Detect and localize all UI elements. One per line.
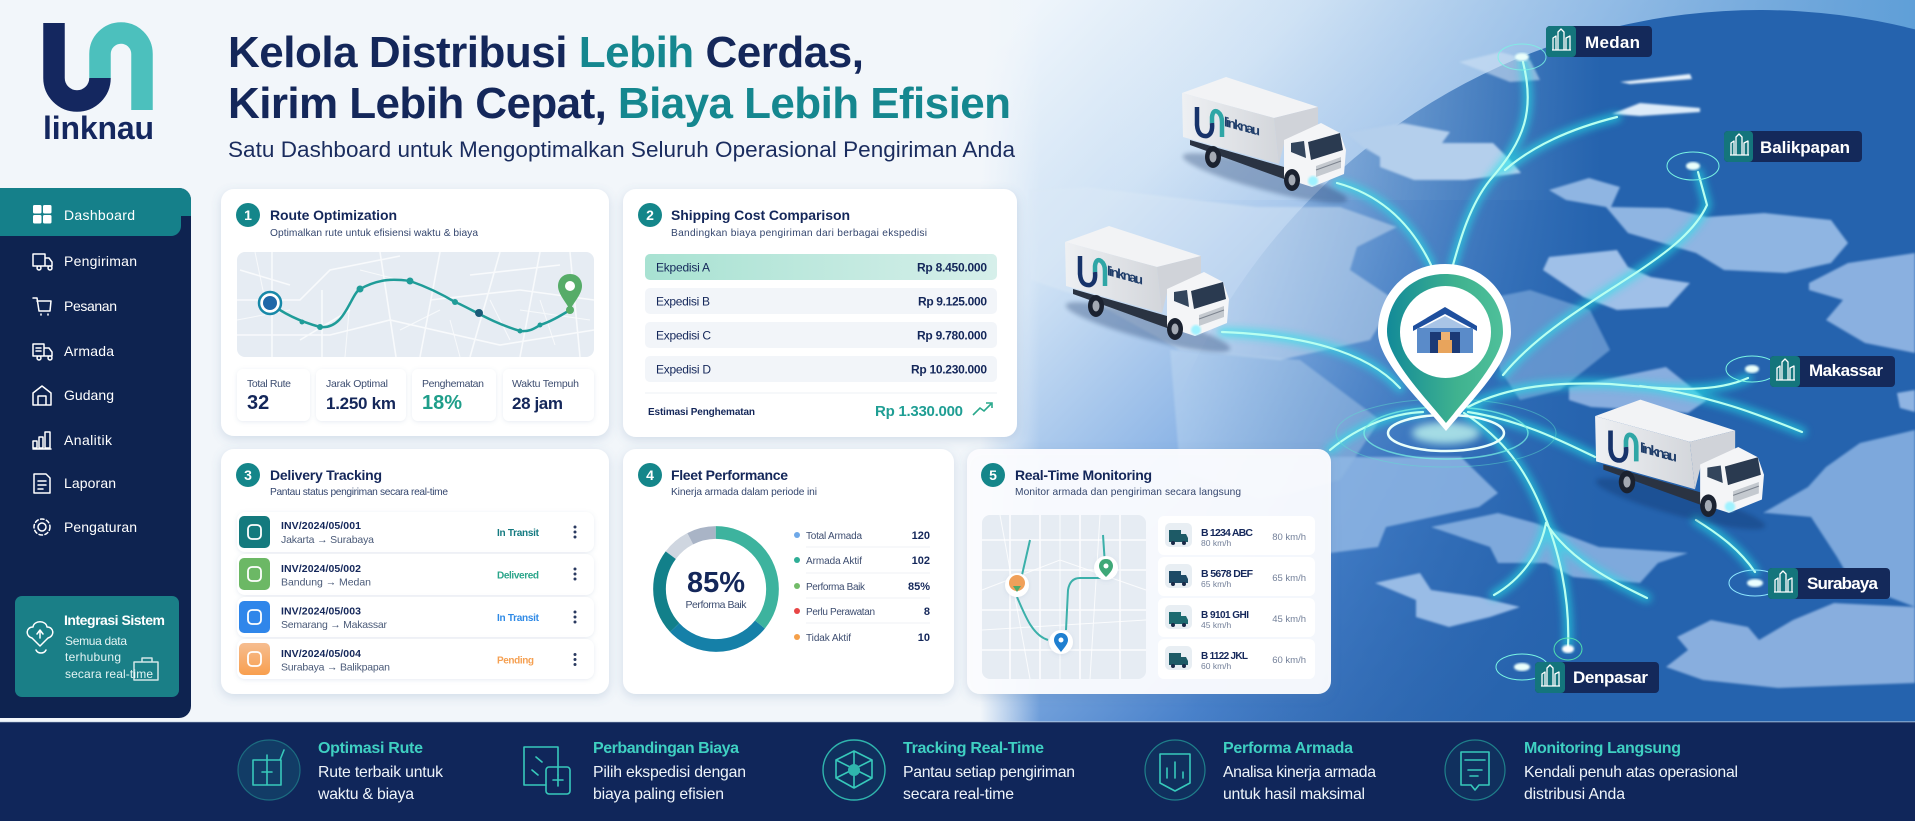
icon: warehouse [1413,307,1477,353]
sidebar [0,188,191,718]
vehicle: B 1234 ABC: 80 km/h [1201,538,1232,548]
panel: 1 Route Optimization: Optimalkan rute untuk efisiensi waktu & biaya [270,228,478,239]
vehicle: B 5678 DEF [1158,557,1315,596]
logo: linknau [43,23,154,146]
feature: Tracking Real-Time: Tracking Real-Time [903,740,1044,757]
menu: Pengiriman: Pengiriman [64,253,137,269]
row: Expedisi B: Rp 9.125.000 [918,294,987,308]
stat: Jarak Optimal [316,369,406,421]
shipment row 4: Pending [497,656,534,666]
vehicle: B 9101 GHI: B 9101 GHI [1201,610,1249,621]
panel: 5 Real-Time Monitoring: Real-Time Monitoring [1015,467,1152,483]
donut chart [660,532,772,646]
truck 3: linknau [1640,440,1677,466]
feature: Tracking Real-Time [823,740,1075,803]
bottom feature band [0,721,1915,821]
city label: Medan: Medan [1585,33,1640,52]
row: Expedisi B: Expedisi B [656,294,710,308]
stat: Jarak Optimal: 1.250 km [326,394,396,413]
truck 1 [1180,77,1350,212]
subtitle: Satu Dashboard untuk Mengoptimalkan Seluruh Operasional Pengiriman Anda [228,137,1015,162]
stat: Jarak Optimal: Jarak Optimal [326,378,388,390]
estimated savings [648,403,992,420]
monitoring map [982,515,1146,679]
row: Ekpedisi A: Rp 8.450.000 [917,260,987,274]
vehicle: B 1234 ABC: 80 km/h [1272,532,1306,543]
city nodes [1496,44,1781,680]
stat: Total Rute [237,369,310,421]
city label: Balikpapan [1724,131,1862,162]
stat: Waktu Tempuh [503,369,594,421]
city label: Denpasar [1535,662,1659,693]
row: Expedisi C: Expedisi C [656,328,711,342]
active menu: Dashboard [0,188,191,236]
truck 2: linknau [1107,263,1143,288]
row: Expedisi D: Expedisi D [656,362,711,376]
legend: 8 [924,606,930,618]
legend: 10 [918,632,930,644]
menu: Laporan [34,474,116,493]
shipment row 1: In Transit [497,528,540,539]
stat: Penghematan [412,369,496,421]
vehicle: B 1234 ABC [1158,516,1315,555]
integration box: terhubung [65,650,121,664]
menu: Pengiriman [33,253,137,270]
row: Ekpedisi A: Ekpedisi A [656,260,710,274]
panel: 3 Delivery Tracking: Delivery Tracking [270,467,382,483]
shipment row 2: Delivered [497,570,539,582]
feature: Performa Armada: Performa Armada [1223,740,1353,757]
panel: 1 Route Optimization: Route Optimization [270,207,397,223]
integration box: Semua data [65,634,127,648]
feature: Monitoring Langsung [1445,740,1738,803]
stat: Penghematan: Penghematan [422,378,484,390]
shipment row 4 [237,639,594,679]
title [228,28,1011,128]
shipment row 1: Jakarta → Surabaya [281,534,374,546]
panel: 2 Shipping Cost Comparison [623,189,1017,437]
row: Expedisi C: Rp 9.780.000 [917,328,987,342]
legend: Armada Aktif [806,556,862,567]
legend [794,530,930,644]
city label: Makassar [1770,356,1895,387]
shipment row 3: In Transit [497,613,540,624]
legend: Perlu Perawatan [806,607,875,618]
title: Kelola Distribusi Lebih Cerdas, [228,28,864,77]
feature: Perbandingan Biaya: biaya paling efisien [593,786,724,803]
donut chart: 85% [687,567,745,599]
feature: Monitoring Langsung: distribusi Anda [1524,786,1625,803]
panel: 1 Route Optimization: 1 [244,207,252,223]
feature: Perbandingan Biaya: Pilih ekspedisi dengan [593,764,746,781]
vehicle: B 9101 GHI: 45 km/h [1201,620,1232,630]
integration box: Integrasi Sistem [64,612,165,628]
feature: Optimasi Rute: Rute terbaik untuk [318,764,443,781]
vehicle: B 1122 JKL: B 1122 JKL [1201,651,1248,662]
shipment row 4: INV/2024/05/004 [281,648,361,660]
estimated savings: Rp 1.330.000 [875,403,963,420]
city label: Denpasar: Denpasar [1573,668,1648,687]
integration box: secara real-time [65,667,153,681]
panel: 2 Shipping Cost Comparison: Shipping Cost Comparison [671,207,850,223]
row: Ekpedisi A [645,254,997,280]
vehicle: B 5678 DEF: B 5678 DEF [1201,568,1254,580]
shipment row 2 [237,554,594,595]
legend: 85% [908,581,930,593]
active menu: Dashboard: Dashboard [64,207,135,223]
legend: 120 [912,530,930,542]
panel: 3 Delivery Tracking: Pantau status pengiriman secara real-time [270,487,448,498]
feature: Monitoring Langsung: Kendali penuh atas operasional [1524,764,1738,781]
panel: 4 Fleet Performance: 4 [646,467,654,483]
panel: 5 Real-Time Monitoring: 5 [989,467,997,483]
panel: 2 Shipping Cost Comparison: Bandingkan biaya pengiriman dari berbagai ekspedisi [671,228,927,239]
integration box [15,596,179,697]
menu: Pesanan: Pesanan [64,298,117,314]
shipment row 2: INV/2024/05/002 [281,563,361,575]
menu: Armada [33,343,114,360]
menu: Pengaturan: Pengaturan [64,519,137,535]
stat: Waktu Tempuh: Waktu Tempuh [512,378,579,390]
stat: Total Rute: 32 [247,392,269,414]
feature: Performa Armada: Analisa kinerja armada [1223,764,1376,781]
estimated savings: Estimasi Penghematan [648,407,755,418]
legend: Performa Baik [806,582,866,593]
title: Kirim Lebih Cepat, Biaya Lebih Efisien [228,79,1011,128]
feature: Optimasi Rute: Optimasi Rute [318,740,423,757]
feature: Perbandingan Biaya [524,740,746,803]
menu: Armada: Armada [64,343,114,359]
panel: 1 Route Optimization [221,189,609,436]
vehicle: B 1122 JKL: 60 km/h [1201,661,1232,671]
hub rings [1336,399,1556,467]
shipment row 3 [237,597,594,637]
feature: Monitoring Langsung: Monitoring Langsung [1524,740,1681,757]
legend: 102 [912,555,930,567]
vehicle: B 1122 JKL: 60 km/h [1272,655,1306,666]
truck 1: linknau [1224,114,1260,139]
panel: 3 Delivery Tracking: 3 [244,467,252,483]
vehicle: B 9101 GHI [1158,598,1315,637]
feature: Perbandingan Biaya: Perbandingan Biaya [593,740,739,757]
city label: Makassar: Makassar [1809,361,1883,380]
vehicle: B 1234 ABC: B 1234 ABC [1201,527,1253,539]
feature: Optimasi Rute [238,740,443,803]
feature: Optimasi Rute: waktu & biaya [317,786,414,803]
main hub pin with warehouse [1378,264,1511,431]
shipment row 2: Bandung → Medan [281,576,371,588]
row: Expedisi B [645,288,997,314]
stat: Waktu Tempuh: 28 jam [512,394,563,413]
shipment row 4: Surabaya → Balikpapan [281,662,390,674]
menu: Laporan: Laporan [64,475,116,491]
panel: 2 Shipping Cost Comparison: 2 [646,207,654,223]
panel: 4 Fleet Performance: Fleet Performance [671,467,788,483]
menu: Gudang [33,386,114,405]
stat: Total Rute: Total Rute [247,378,291,390]
vehicle: B 9101 GHI: 45 km/h [1272,614,1306,625]
logo: linknau: linknau [43,110,154,146]
legend: Tidak Aktif [806,633,851,644]
shipment row 1: INV/2024/05/001 [281,520,361,532]
vehicle: B 5678 DEF: 65 km/h [1272,573,1306,584]
feature: Performa Armada: untuk hasil maksimal [1223,786,1365,803]
map: Indonesia distribution network [980,0,1915,730]
city label: Balikpapan: Balikpapan [1760,138,1850,157]
shipment row 3: INV/2024/05/003 [281,606,361,618]
route map [237,252,594,357]
row: Expedisi C [645,322,997,348]
feature: Performa Armada [1145,740,1376,803]
menu: Pesanan [33,298,117,315]
legend: Total Armada [806,531,862,542]
land masses [1030,52,1915,688]
city label: Surabaya: Surabaya [1807,574,1879,593]
delivery routes [1222,62,1802,647]
menu: Gudang: Gudang [64,387,114,403]
truck 2 [1063,226,1233,361]
stat: Penghematan: 18% [422,392,462,414]
city label: Medan [1546,26,1652,57]
menu: Analitik: Analitik [64,432,113,448]
feature: Tracking Real-Time: Pantau setiap pengiriman [903,764,1075,781]
panel: 3 Delivery Tracking [221,449,609,694]
panel: 5 Real-Time Monitoring: Monitor armada dan pengiriman secara langsung [1015,487,1241,498]
panel: 5 Real-Time Monitoring [967,449,1331,694]
panel: 4 Fleet Performance: Kinerja armada dalam periode ini [671,487,817,498]
donut chart: Performa Baik [686,599,747,611]
row: Expedisi D: Rp 10.230.000 [911,362,987,376]
vehicle: B 1122 JKL [1158,639,1315,679]
shipment row 3: Semarang → Makassar [281,619,388,631]
row: Expedisi D [645,356,997,382]
panel: 4 Fleet Performance [623,449,954,694]
city label: Surabaya [1768,568,1890,599]
shipment row 1 [237,512,594,552]
feature: Tracking Real-Time: secara real-time [903,786,1014,803]
menu: Analitik [33,432,113,449]
vehicle: B 5678 DEF: 65 km/h [1201,579,1232,589]
truck 3 [1593,400,1768,538]
